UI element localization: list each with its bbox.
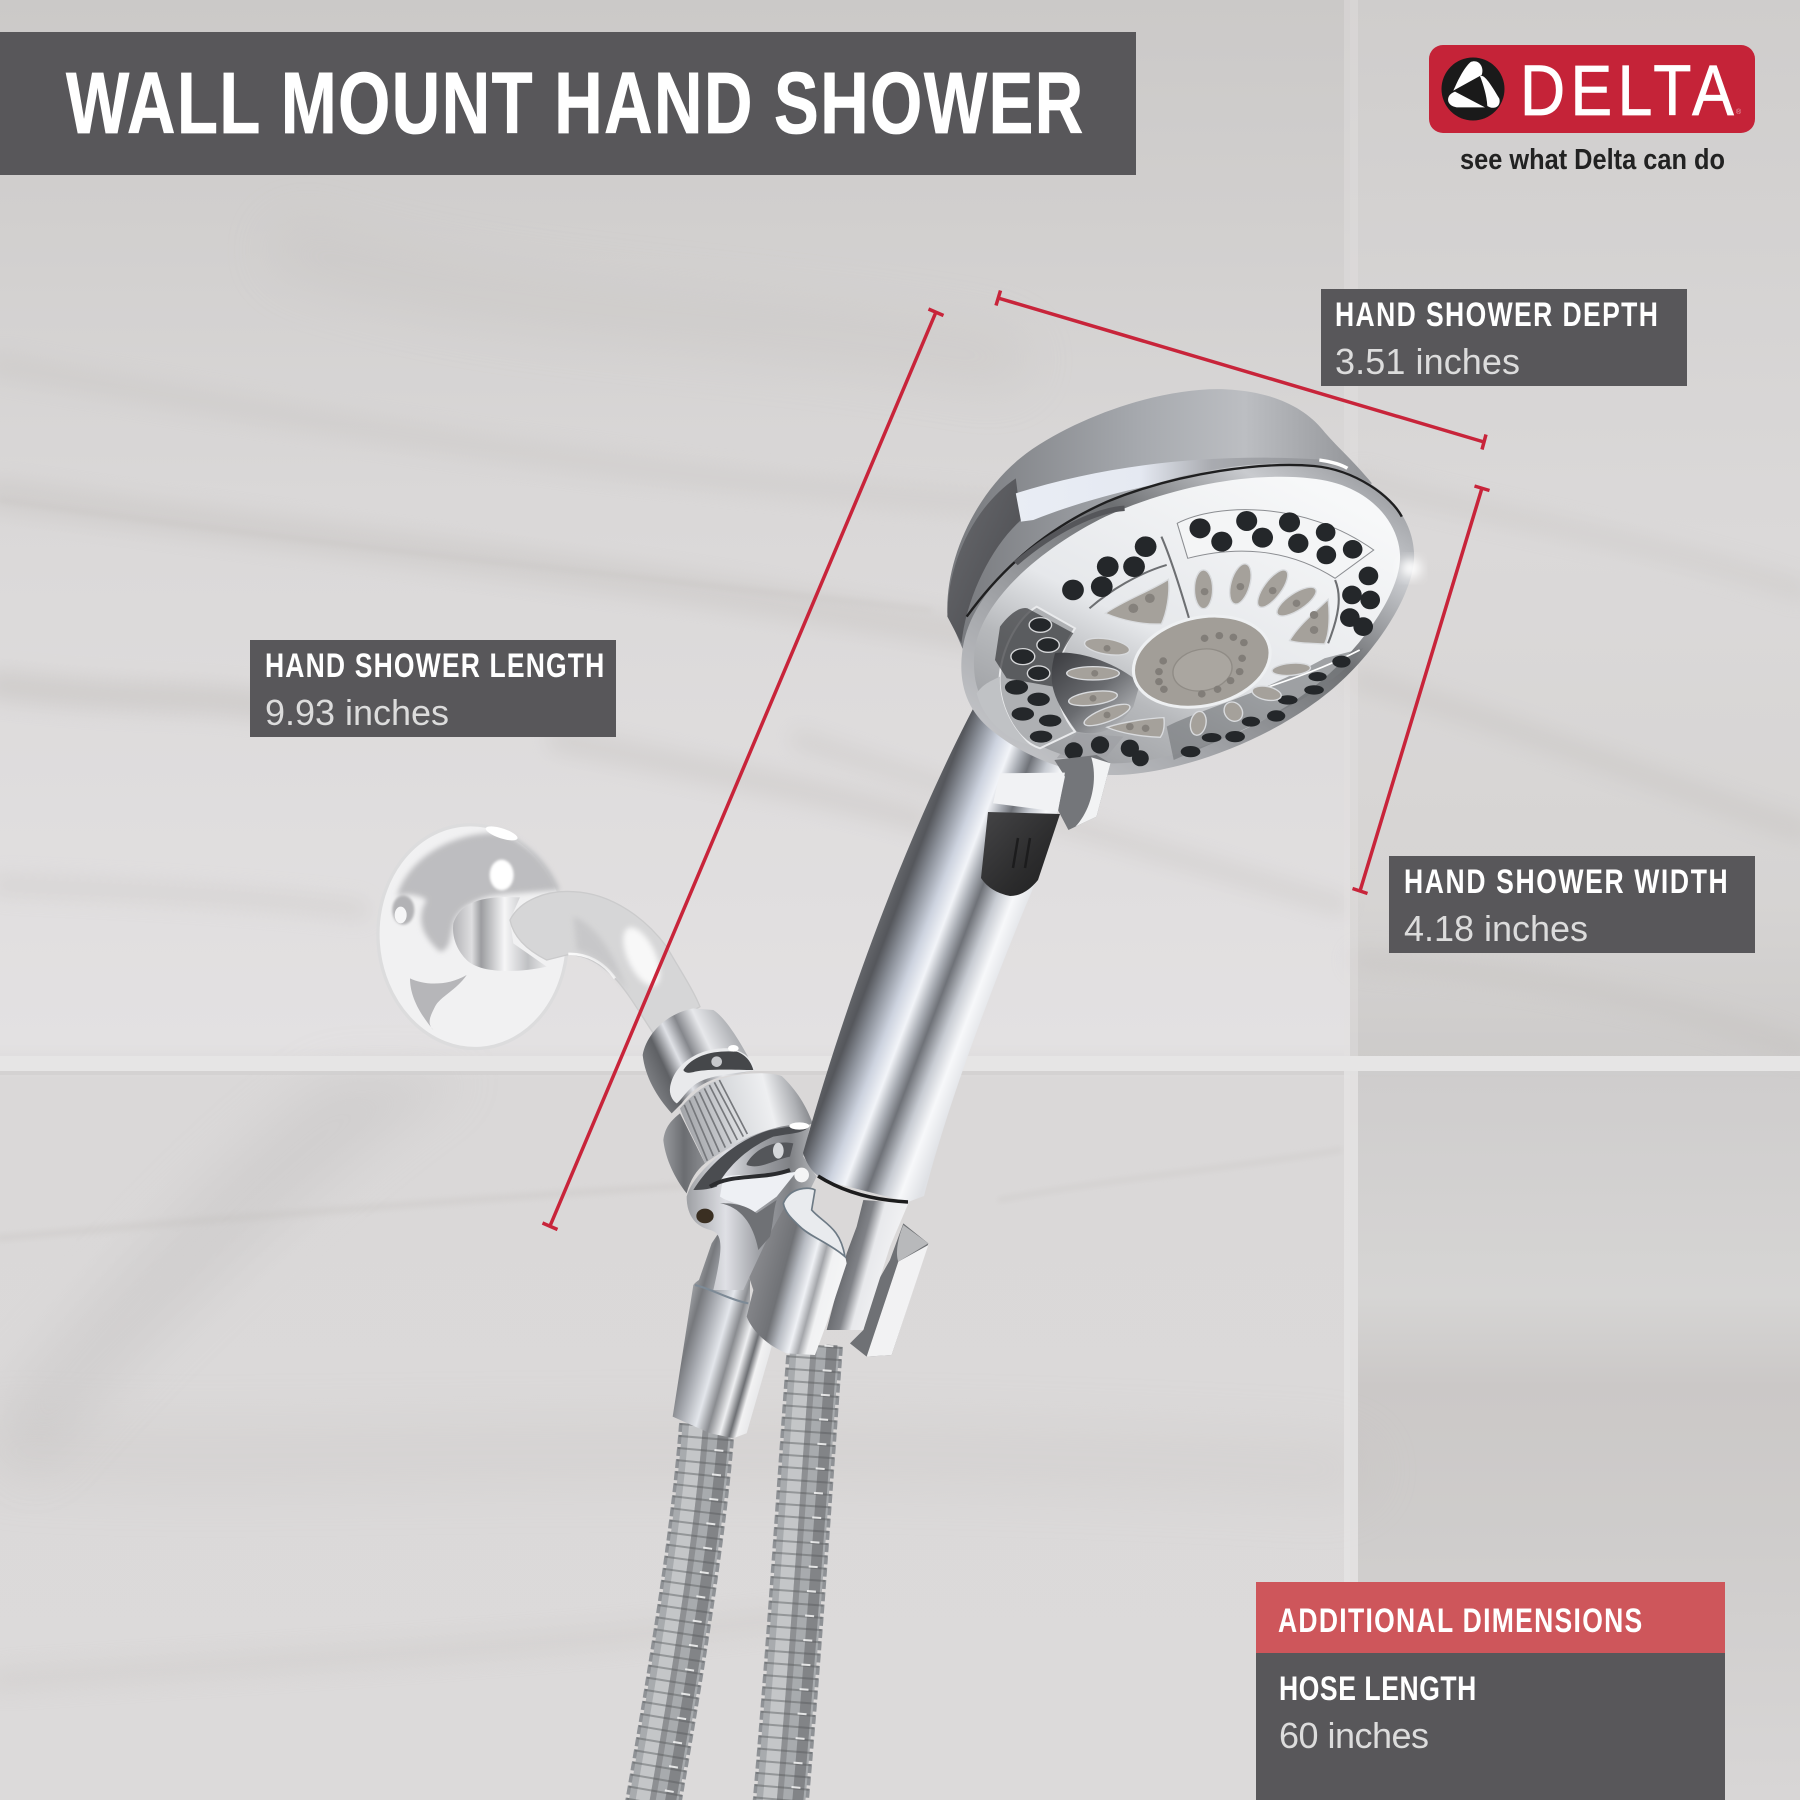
flash highlight (1400, 558, 1421, 578)
arm neck (453, 897, 547, 971)
dimension line: hand shower width (1352, 486, 1490, 894)
label: hand shower width: HAND SHOWER WIDTH (1404, 863, 1728, 901)
upper nozzle panel (1177, 510, 1374, 578)
wordmark: DELTA (1520, 51, 1734, 131)
title: WALL MOUNT HAND SHOWER (66, 56, 1083, 152)
shower arm and wall flange (370, 818, 700, 1055)
lower handle section (827, 1200, 908, 1330)
mount body (687, 1122, 817, 1290)
hose connector collar (673, 1278, 772, 1438)
cup behind nut (663, 1113, 705, 1193)
swivel mount (643, 1008, 845, 1290)
neck highlight (993, 773, 1065, 812)
knurled nut (680, 1073, 813, 1163)
dimension line: hand shower length (542, 309, 944, 1230)
label: hand shower length: HAND SHOWER LENGTH (265, 647, 604, 685)
lower mount: hose connector, bracket and clip (673, 1200, 928, 1438)
label: hand shower depth (1321, 289, 1687, 386)
hose left (641, 1425, 724, 1800)
panel: additional dimensions: HOSE LENGTH (1279, 1670, 1476, 1708)
dimension line: hand shower depth (996, 290, 1486, 450)
Delta logo (1429, 45, 1755, 176)
panel: additional dimensions: ADDITIONAL DIMENSIONS (1278, 1602, 1642, 1640)
label: hand shower length (250, 640, 616, 737)
rear tube (697, 1233, 750, 1307)
lower left chrome reflections (977, 607, 1140, 758)
curved arm (510, 891, 700, 1033)
upper collar (643, 1008, 755, 1113)
lever (1054, 755, 1111, 830)
label: hand shower length: 9.93 inches (265, 692, 449, 733)
holder clip (850, 1223, 928, 1357)
title bar (0, 32, 1136, 175)
registered mark: ® (1736, 108, 1742, 116)
label: hand shower depth: 3.51 inches (1335, 341, 1520, 382)
label: hand shower width: 4.18 inches (1404, 908, 1588, 949)
hose right (769, 1345, 832, 1800)
label: hand shower width (1389, 856, 1755, 953)
logo emblem (1442, 58, 1504, 120)
wall flange (370, 818, 575, 1055)
bracket (718, 1207, 847, 1355)
head face and rim (961, 463, 1414, 775)
panel: additional dimensions: 60 inches (1279, 1715, 1429, 1756)
trigger button (981, 812, 1060, 896)
black spray nozzles (1005, 511, 1380, 766)
spoke lines (1089, 537, 1339, 643)
shower head (947, 389, 1421, 830)
head back dome (947, 389, 1372, 650)
tagline: see what Delta can do (1460, 144, 1725, 176)
release lever (783, 1188, 845, 1257)
hand shower handle (803, 700, 1068, 1202)
center spray disc (1123, 603, 1280, 720)
gray spray petals (1067, 562, 1329, 737)
panel: additional dimensions (1256, 1582, 1725, 1800)
label: hand shower depth: HAND SHOWER DEPTH (1335, 296, 1658, 334)
